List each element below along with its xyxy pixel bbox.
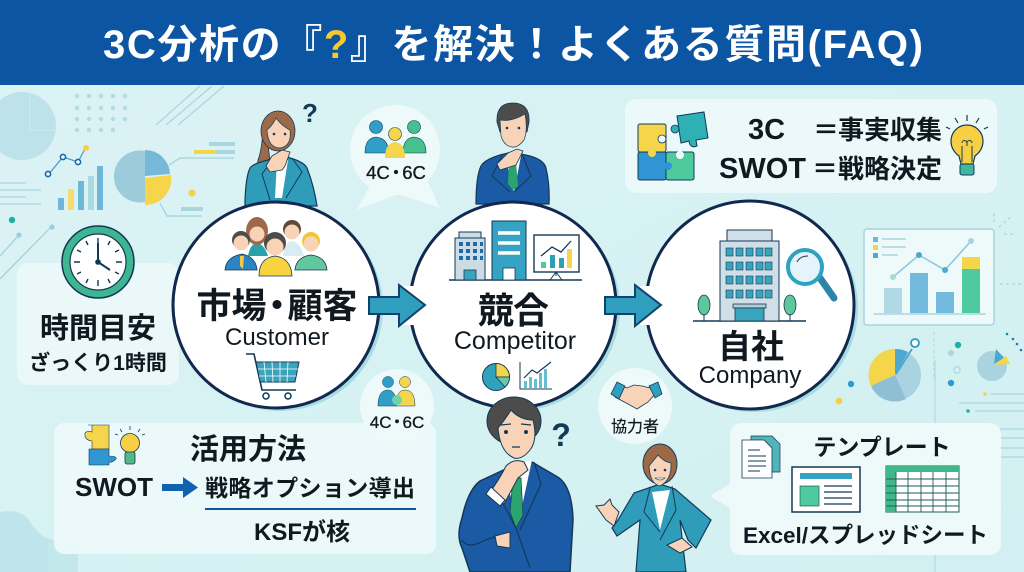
icon: pie chart [482,364,510,390]
label: Customer: Customer [225,324,329,351]
pie chart: right [869,339,921,402]
label: Company: Company [699,362,801,389]
icon: customer group [225,217,327,276]
text: 3C equals fact collection [748,114,942,146]
icon: puzzle pieces [85,425,116,465]
icon: spreadsheet [886,466,959,512]
text: excel and spreadsheet: Excel/スプレッドシート [743,523,988,548]
label: 4C・6C [366,162,426,183]
bubble: 4C 6C top [350,105,440,210]
heading: template: テンプレート [813,434,951,460]
icon: documents [742,436,780,478]
icon: magnifying glass [788,250,834,298]
chart panel: dashboard [864,229,994,325]
text: SWOT equals strategy decision: 戦略決定 [838,154,942,184]
label: Competitor: Competitor [454,327,576,355]
bubble: 4C 6C bottom [360,369,434,443]
text: one hour: ざっくり1時間 [29,351,167,375]
icon: light bulb small [115,426,145,464]
person: man thinking bottom [459,397,573,572]
panel: time estimate [17,226,179,385]
text: 3C equals fact collection: ＝ [813,115,839,145]
icon: clock [62,226,134,298]
icon: company building [693,230,806,321]
text: SWOT equals strategy decision: SWOT [719,153,806,185]
panel: how to use [54,423,436,554]
label: own company: 自社 [718,328,784,365]
background decoration: left charts [0,86,235,572]
text: SWOT: SWOT [75,472,153,502]
text: SWOT equals strategy decision [719,153,942,185]
icon: three people [365,120,426,158]
arrow: customer to competitor [369,285,425,326]
divider [205,508,416,510]
icon: handshake [611,382,662,409]
text: 3C equals fact collection: 3C [748,114,785,146]
icon: growth chart [520,362,552,389]
icon: puzzle [638,112,708,180]
header bar [0,0,1024,85]
icon: two people [378,376,415,406]
person: woman presenting [596,444,711,572]
text: SWOT equals strategy decision: ＝ [812,154,838,184]
arrow: SWOT to options [162,477,198,498]
title: 3C分析の『?』を解決！よくある質問(FAQ) [103,23,923,67]
heading: how to use: 活用方法 [190,433,306,466]
label: 4C・6C [370,413,424,432]
text: 3C equals fact collection: 事実収集 [838,115,942,145]
person: man thinking top [476,103,549,204]
label: 協力者 [611,418,659,436]
circle: company [646,201,858,412]
icon: light bulb [946,115,988,175]
panel: templates [710,423,1001,555]
background decoration: right charts [836,213,1024,572]
icon: form layout [792,467,860,512]
heading: time estimate: 時間目安 [40,312,156,345]
circle: customer [173,202,383,411]
bubble: partner [598,368,672,444]
icon: question mark: ? [302,98,318,128]
icon: competitor buildings [449,221,582,280]
text: KSF is core: KSFが核 [254,518,350,546]
icon: question mark: ? [551,417,571,453]
text: strategic options: 戦略オプション導出 [205,475,415,501]
icon: shopping cart [246,354,299,399]
label: competitor: 競合 [478,290,549,331]
person: woman thinking top [245,98,318,206]
circle: competitor [410,202,620,411]
label: market and customer: 市場・顧客 [196,287,358,326]
arrow: competitor to company [605,285,661,326]
panel: 3C and SWOT [625,99,997,193]
